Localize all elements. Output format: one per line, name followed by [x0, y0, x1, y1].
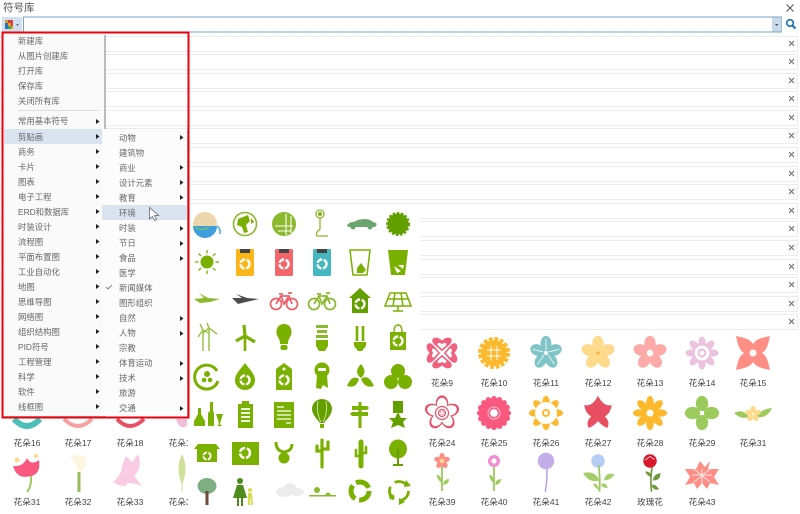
submenu items: 食品 — [119, 253, 136, 263]
submenu items: 环境 — [119, 208, 136, 218]
toolbar: library button and search field — [2, 17, 782, 32]
menu items: 工业自动化 — [18, 267, 60, 277]
highlighted item — [4, 129, 102, 144]
icon: eco plug — [316, 210, 328, 236]
flower labels: 花朵42 — [585, 496, 612, 507]
flower 17 — [64, 419, 92, 426]
icon: recycle box — [232, 442, 259, 465]
icon: spiral bulb — [316, 325, 328, 351]
submenu items: 旅游 — [119, 388, 136, 398]
flower grid: right side — [0, 331, 800, 514]
flower 29 — [685, 396, 719, 430]
separator — [18, 110, 100, 111]
icon: two wind turbines — [198, 323, 217, 351]
flower 14 — [685, 336, 719, 370]
flower labels: 花朵39 — [429, 496, 456, 507]
icon: ribbon award — [314, 362, 330, 389]
flower 43 — [685, 461, 719, 489]
close button — [786, 4, 794, 12]
icon: recycle tag — [276, 363, 292, 390]
icon: trefoil leaves — [347, 364, 374, 387]
icon: three lobes — [384, 364, 412, 389]
flower labels: 花朵26 — [533, 437, 560, 448]
flower labels: 花朵31 — [740, 437, 767, 448]
submenu items: 设计元素 — [119, 178, 152, 188]
icon: red bin — [275, 249, 293, 276]
icon: globe with water — [193, 212, 220, 238]
submenu items: 技术 — [119, 373, 136, 383]
panel: clip art submenu — [102, 129, 188, 416]
menu items: 时装设计 — [18, 222, 52, 232]
submenu items: 动物 — [119, 133, 136, 143]
submenu items — [119, 133, 153, 413]
flower 34 — [178, 454, 186, 492]
submenu items: 商业 — [119, 163, 136, 173]
menu items: 科学 — [18, 372, 35, 382]
flower labels: 花朵41 — [533, 496, 560, 507]
flower labels: 花朵24 — [429, 437, 456, 448]
submenu arrows — [180, 135, 184, 411]
submenu items: 交通 — [119, 403, 136, 413]
flower labels: 花朵10 — [481, 377, 508, 388]
flower 15 — [736, 336, 770, 370]
icon: earth grid — [272, 212, 296, 236]
flower 41 — [538, 453, 554, 492]
icon: filled bin — [388, 250, 408, 275]
flower 24 — [424, 396, 460, 430]
icon: leafy tree — [389, 440, 407, 465]
flower labels: 玫瑰花 — [637, 496, 663, 507]
icon: document — [274, 402, 294, 428]
icon: recycle circle — [388, 480, 411, 505]
icon: sun badge — [388, 214, 408, 234]
flower 32 — [70, 455, 86, 492]
menu items: ERD和数据库 — [18, 207, 69, 217]
submenu items: 图形组织 — [119, 298, 152, 308]
flower labels: 花朵34 — [169, 496, 196, 507]
row close marks — [789, 41, 794, 324]
icon: eco house — [349, 288, 371, 313]
icon: light bulb — [276, 324, 292, 350]
icon: sun — [195, 250, 219, 274]
icon: woman and child — [233, 478, 253, 506]
icon: landscape — [309, 487, 336, 496]
flower 33 — [113, 454, 142, 486]
icon: green plane — [194, 293, 220, 303]
menu items: PID符号 — [18, 342, 49, 352]
menu items: 剪贴画 — [18, 132, 43, 142]
highlighted item: environment — [102, 205, 187, 220]
submenu items: 节日 — [119, 238, 136, 248]
submenu items: 建筑物 — [119, 148, 144, 158]
menu items: 地图 — [18, 282, 35, 292]
flower labels: 花朵13 — [637, 377, 664, 388]
menu items: 从图片创建库 — [18, 51, 68, 61]
flower 10 — [481, 340, 507, 366]
flower labels: 花朵16 — [14, 437, 41, 448]
flower 25 — [472, 391, 516, 435]
submenu items: 宗教 — [119, 343, 136, 353]
callout: red highlight frame — [2, 32, 188, 418]
flower labels — [14, 377, 767, 507]
icon: recycle drop — [235, 363, 255, 390]
flower 18 — [117, 419, 144, 426]
flower 28 — [633, 396, 667, 430]
icon: circular droplets — [195, 365, 218, 389]
title: 符号库 — [3, 1, 34, 14]
icon: bottles and glass — [194, 402, 223, 426]
menu items: 保存库 — [18, 81, 43, 91]
icon: wind turbine — [236, 325, 255, 351]
flower labels: 花朵9 — [431, 377, 453, 388]
icon: signpost — [350, 402, 369, 428]
flower labels: 花朵11 — [533, 377, 559, 388]
flower labels: 花朵15 — [740, 377, 767, 388]
menu items: 网络图 — [18, 312, 43, 322]
flower labels: 花朵32 — [65, 496, 92, 507]
flower 16 — [14, 419, 40, 426]
submenu items: 医学 — [119, 268, 136, 278]
icon: open recycle box — [194, 444, 220, 462]
submenu items: 人物 — [119, 328, 136, 338]
icon: grey plane — [232, 294, 259, 304]
menu items: 平面布置图 — [18, 252, 60, 262]
icon: cloud — [276, 483, 304, 497]
flower labels: 花朵18 — [117, 437, 144, 448]
flower 9 — [427, 338, 457, 368]
flower 27 — [584, 396, 612, 428]
flower 13 — [632, 336, 668, 370]
check mark — [106, 285, 112, 289]
icon: hot air balloon — [312, 399, 332, 428]
panel: main menu — [4, 34, 106, 417]
flower 26 — [529, 396, 563, 430]
icon: red bicycle — [270, 293, 298, 310]
menu items: 组织结构图 — [18, 327, 60, 337]
submenu items: 自然 — [119, 313, 136, 323]
submenu items: 时装 — [119, 223, 136, 233]
submenu arrows — [96, 119, 100, 409]
icon: car — [347, 219, 377, 230]
menu items: 线框图 — [18, 402, 43, 412]
menu items: 工程管理 — [18, 357, 52, 367]
icon: antler cactus — [276, 442, 292, 462]
flower labels: 花朵43 — [689, 496, 716, 507]
menu items: 常用基本符号 — [18, 116, 68, 126]
flower 31 — [734, 406, 772, 422]
icon: mouse cursor — [150, 208, 158, 220]
icon: earth outline — [234, 212, 256, 236]
submenu items: 体育运动 — [119, 358, 152, 368]
flower 40 — [488, 455, 501, 491]
icon: green bicycle — [308, 293, 336, 310]
flower labels: 花朵31 — [14, 496, 41, 507]
flower 31 left — [13, 454, 39, 492]
menu items: 思维导图 — [18, 297, 52, 307]
flower labels: 花朵40 — [481, 496, 508, 507]
flower labels: 花朵14 — [689, 377, 716, 388]
menu items: 关闭所有库 — [18, 96, 60, 106]
menu items: 软件 — [18, 387, 35, 397]
icon: search — [787, 20, 796, 28]
menu items: 打开库 — [18, 66, 43, 76]
menu items: 商务 — [18, 147, 35, 157]
icon: star medal — [389, 401, 407, 428]
icon: yellow bin — [236, 249, 254, 276]
flower labels: 花朵27 — [585, 437, 612, 448]
flower grid: left side — [13, 377, 767, 507]
flower labels: 花朵29 — [689, 437, 716, 448]
rose — [643, 454, 660, 492]
flower labels: 花朵33 — [117, 496, 144, 507]
panel: environment clip art — [188, 205, 420, 514]
menu items: 流程图 — [18, 237, 43, 247]
icon: saguaro cactus — [317, 440, 328, 467]
flower 12 — [580, 336, 616, 370]
flower 39 — [433, 453, 451, 491]
icon: solar panel — [385, 293, 411, 311]
submenu items: 教育 — [119, 193, 136, 203]
flower 11 — [529, 336, 563, 370]
menu items: 电子工程 — [18, 192, 52, 202]
menu items — [18, 36, 69, 412]
icon: cactus — [356, 442, 366, 466]
icon: recycle arrows — [351, 482, 369, 500]
collapsed library rows — [0, 36, 798, 330]
icon: teal bin — [313, 249, 331, 276]
flower 19 partial — [176, 419, 187, 427]
menu items: 图表 — [18, 177, 35, 187]
flower labels: 花朵19 — [169, 437, 196, 448]
menu items: 新建库 — [18, 36, 43, 46]
icon: outlined bin — [350, 250, 370, 275]
menu items: 卡片 — [18, 162, 35, 172]
flower 42 — [583, 454, 614, 492]
flower labels: 花朵28 — [637, 437, 664, 448]
flower labels: 花朵12 — [585, 377, 612, 388]
icon: coloured tree — [198, 478, 216, 505]
flower labels: 花朵17 — [65, 437, 92, 448]
flower labels: 花朵25 — [481, 437, 508, 448]
icon: recycle bag — [390, 325, 406, 350]
icon: battery — [238, 401, 253, 428]
icon: tube bulb — [354, 326, 366, 351]
submenu items: 新闻媒体 — [119, 283, 153, 293]
